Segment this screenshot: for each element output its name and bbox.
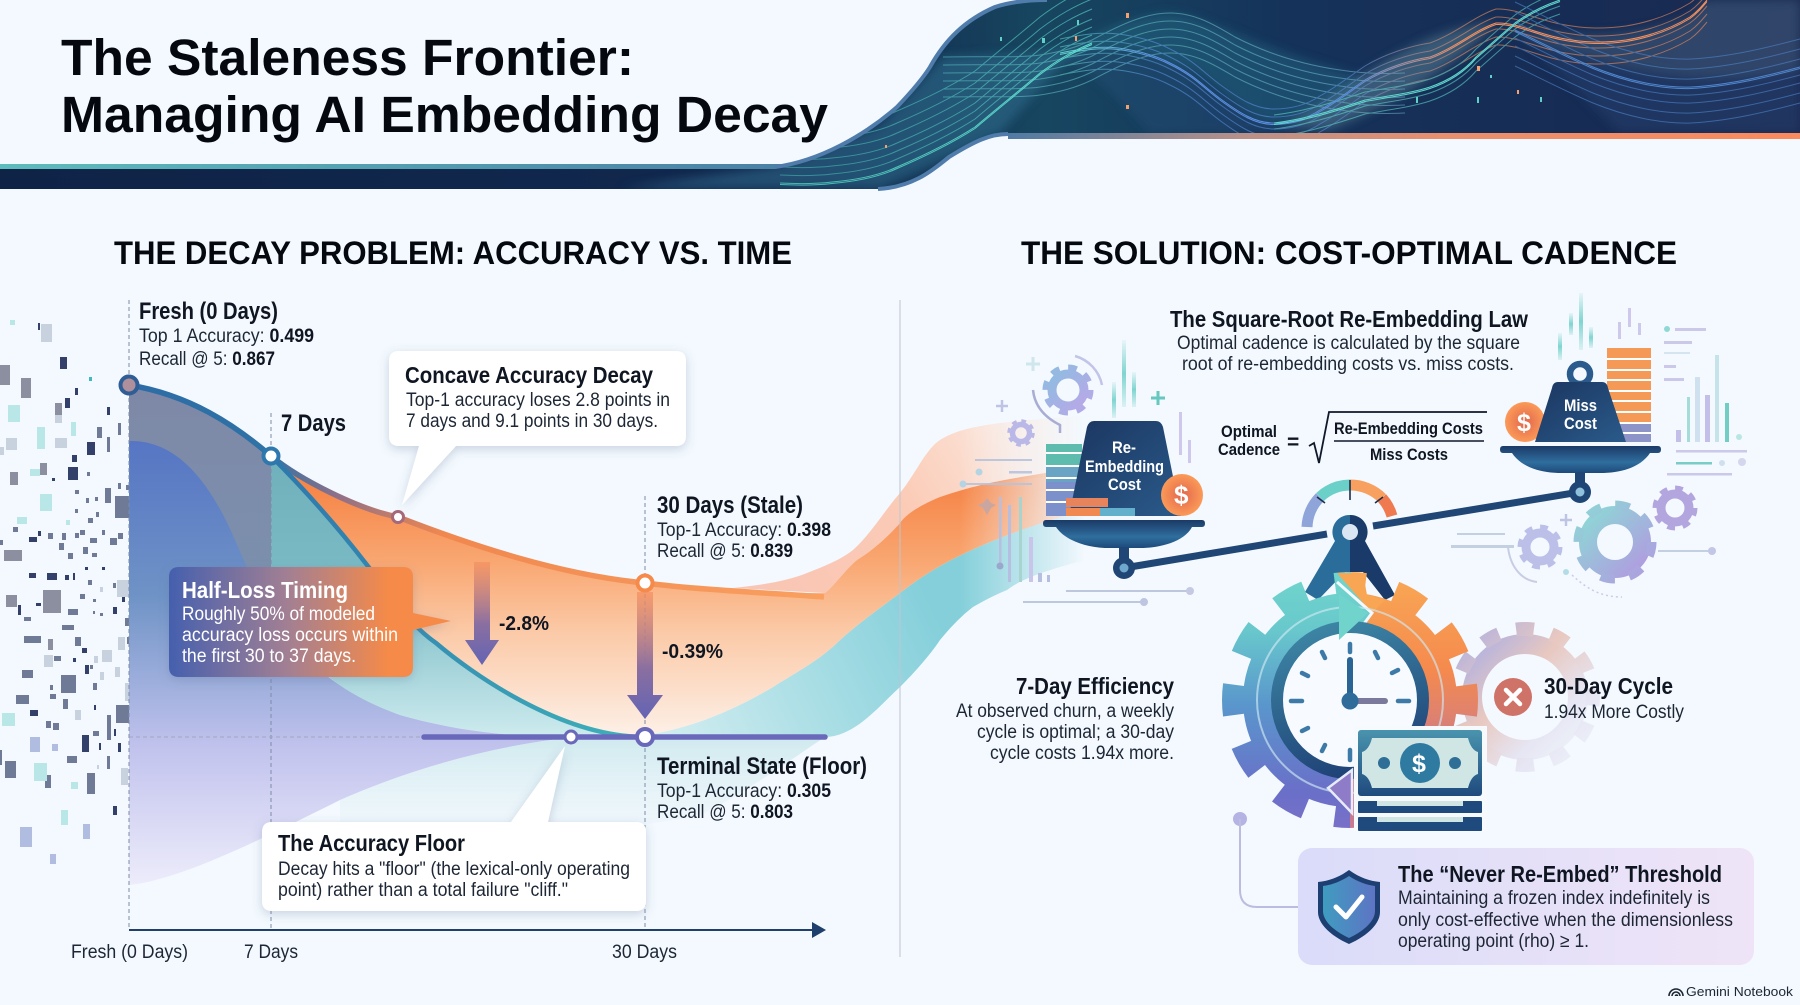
label: 30 days stale: Recall @ 5: 0.839: [657, 541, 793, 562]
right pan: miss cost: Miss: [1564, 396, 1597, 415]
left pan: re-embedding cost: $: [1174, 480, 1189, 510]
callout: accuracy floor: point) rather than a total failure "cliff.": [278, 880, 568, 901]
formula: [1218, 412, 1487, 464]
x axis: [71, 922, 826, 963]
formula: =: [1287, 431, 1299, 454]
icon: shield: [1318, 870, 1380, 944]
formula: Optimal: [1221, 422, 1277, 441]
right pan: miss cost: $: [1517, 409, 1531, 437]
formula: Miss Costs: [1370, 445, 1448, 464]
callout: accuracy floor: Decay hits a "floor" (the lexical-only operating: [278, 859, 630, 880]
area chart: decay bands: [129, 385, 1085, 885]
title: Managing AI Embedding Decay: [61, 86, 829, 143]
callout: concave accuracy decay: 7 days and 9.1 points in 30 days.: [406, 411, 658, 432]
label: fresh: Recall @ 5: 0.867: [139, 349, 275, 370]
text: 7-day efficiency: [956, 673, 1174, 764]
x axis: Fresh (0 Days): [71, 942, 188, 963]
text: 7-day efficiency: cycle costs 1.94x more.: [990, 743, 1174, 764]
floor line: [424, 734, 825, 740]
label: terminal state: Recall @ 5: 0.803: [657, 802, 793, 823]
callout: concave accuracy decay: [389, 351, 686, 505]
connector: [1233, 812, 1300, 907]
fulcrum right leg: [1350, 515, 1395, 600]
text: 7-day efficiency: cycle is optimal; a 30-day: [977, 722, 1174, 743]
label: 30 days stale: 30 Days (Stale): [657, 492, 803, 519]
panel: never re-embed threshold: only cost-effective when the dimensionless: [1398, 910, 1733, 931]
heading: decay problem: THE DECAY PROBLEM: ACCURACY VS. TIME: [114, 235, 792, 271]
watermark: gemini notebook: Gemini Notebook: [1686, 984, 1794, 999]
x axis: 30 Days: [612, 942, 677, 963]
label: 7 days: 7 Days: [281, 410, 346, 437]
cash stack: $: [1412, 750, 1426, 778]
label: fresh: Top 1 Accuracy: 0.499: [139, 326, 314, 347]
data particles: [0, 320, 129, 864]
callout: concave accuracy decay: Concave Accuracy Decay: [405, 362, 653, 388]
orange band: [292, 472, 1064, 734]
recall curve: [271, 456, 645, 737]
callout: half-loss timing: Roughly 50% of modeled: [182, 604, 375, 625]
label: fresh: Fresh (0 Days): [139, 298, 278, 325]
formula text block: root of re-embedding costs vs. miss costs.: [1182, 354, 1514, 375]
chart points: [120, 376, 653, 745]
guide lines: [129, 300, 645, 930]
label: -2.8%: -2.8%: [499, 613, 549, 635]
icon: red x: [1494, 678, 1532, 716]
formula text block: [1170, 306, 1528, 375]
left pan: re-embedding cost: Cost: [1108, 475, 1141, 494]
callout: accuracy floor: [262, 746, 646, 911]
accuracy curve: [129, 385, 824, 597]
left pan: re-embedding cost: [1043, 421, 1205, 579]
callout: half-loss timing: Half-Loss Timing: [182, 577, 348, 603]
right bar chart: [1676, 355, 1742, 442]
label: -0.39%: -0.39%: [662, 641, 723, 663]
callout: concave accuracy decay: Top-1 accuracy loses 2.8 points in: [406, 390, 670, 411]
label: fresh: [139, 298, 314, 370]
teal arrow head: [1339, 594, 1368, 640]
formula text block: Optimal cadence is calculated by the square: [1177, 333, 1520, 354]
gear: 30-day ghost: [1457, 629, 1593, 765]
formula: Re-Embedding Costs: [1334, 419, 1483, 438]
right pan: miss cost: [1500, 348, 1661, 503]
label: terminal state: [657, 753, 867, 823]
heading: solution: THE SOLUTION: COST-OPTIMAL CADENCE: [1021, 235, 1677, 271]
panel: never re-embed threshold: Maintaining a frozen index indefinitely is: [1398, 888, 1710, 909]
rising top bars: [1112, 293, 1641, 463]
header wave banner: [0, 0, 1800, 189]
label: 30 days stale: [657, 492, 831, 562]
text: 30-day cycle: 30-Day Cycle: [1544, 673, 1673, 699]
arrow: -0.39% drop: [627, 592, 663, 719]
cash stack: [1354, 726, 1487, 832]
title: [61, 29, 829, 143]
label: terminal state: Top-1 Accuracy: 0.305: [657, 781, 831, 802]
left pan: re-embedding cost: Embedding: [1085, 457, 1164, 476]
text: 7-day efficiency: At observed churn, a weekly: [956, 701, 1174, 722]
callout: half-loss timing: [169, 567, 451, 677]
arrow: -2.8% drop: [465, 562, 499, 665]
label: terminal state: Terminal State (Floor): [657, 753, 867, 780]
formula: Cadence: [1218, 440, 1280, 459]
x axis: 7 Days: [244, 942, 298, 963]
label: 30 days stale: Top-1 Accuracy: 0.398: [657, 520, 831, 541]
decorative gears and charts around scale: [956, 293, 1794, 999]
scale beam and fulcrum: [1124, 480, 1580, 600]
panel: never re-embed threshold: The “Never Re-Embed” Threshold: [1398, 861, 1722, 887]
text: 30-day cycle: [1544, 673, 1684, 723]
title: The Staleness Frontier:: [61, 29, 634, 86]
text: 7-day efficiency: 7-Day Efficiency: [1016, 673, 1174, 699]
side lines: [960, 326, 1747, 606]
callout: half-loss timing: accuracy loss occurs within: [182, 625, 398, 646]
ribbons flowing to the right: [645, 416, 1085, 737]
panel: never re-embed threshold: operating point (rho) ≥ 1.: [1398, 931, 1589, 952]
text: 30-day cycle: 1.94x More Costly: [1544, 702, 1684, 723]
fulcrum left leg: [1305, 515, 1350, 600]
formula text block: The Square-Root Re-Embedding Law: [1170, 306, 1528, 332]
gear and clock: [1233, 573, 1467, 817]
orange top tooth: [1337, 573, 1385, 613]
callout: half-loss timing: the first 30 to 37 days.: [182, 646, 356, 667]
left pan: re-embedding cost: Re-: [1112, 438, 1136, 457]
right pan: miss cost: Cost: [1564, 414, 1597, 433]
panel: never re-embed threshold: [1298, 848, 1754, 965]
panel divider: [899, 300, 901, 957]
callout: accuracy floor: The Accuracy Floor: [278, 830, 465, 856]
